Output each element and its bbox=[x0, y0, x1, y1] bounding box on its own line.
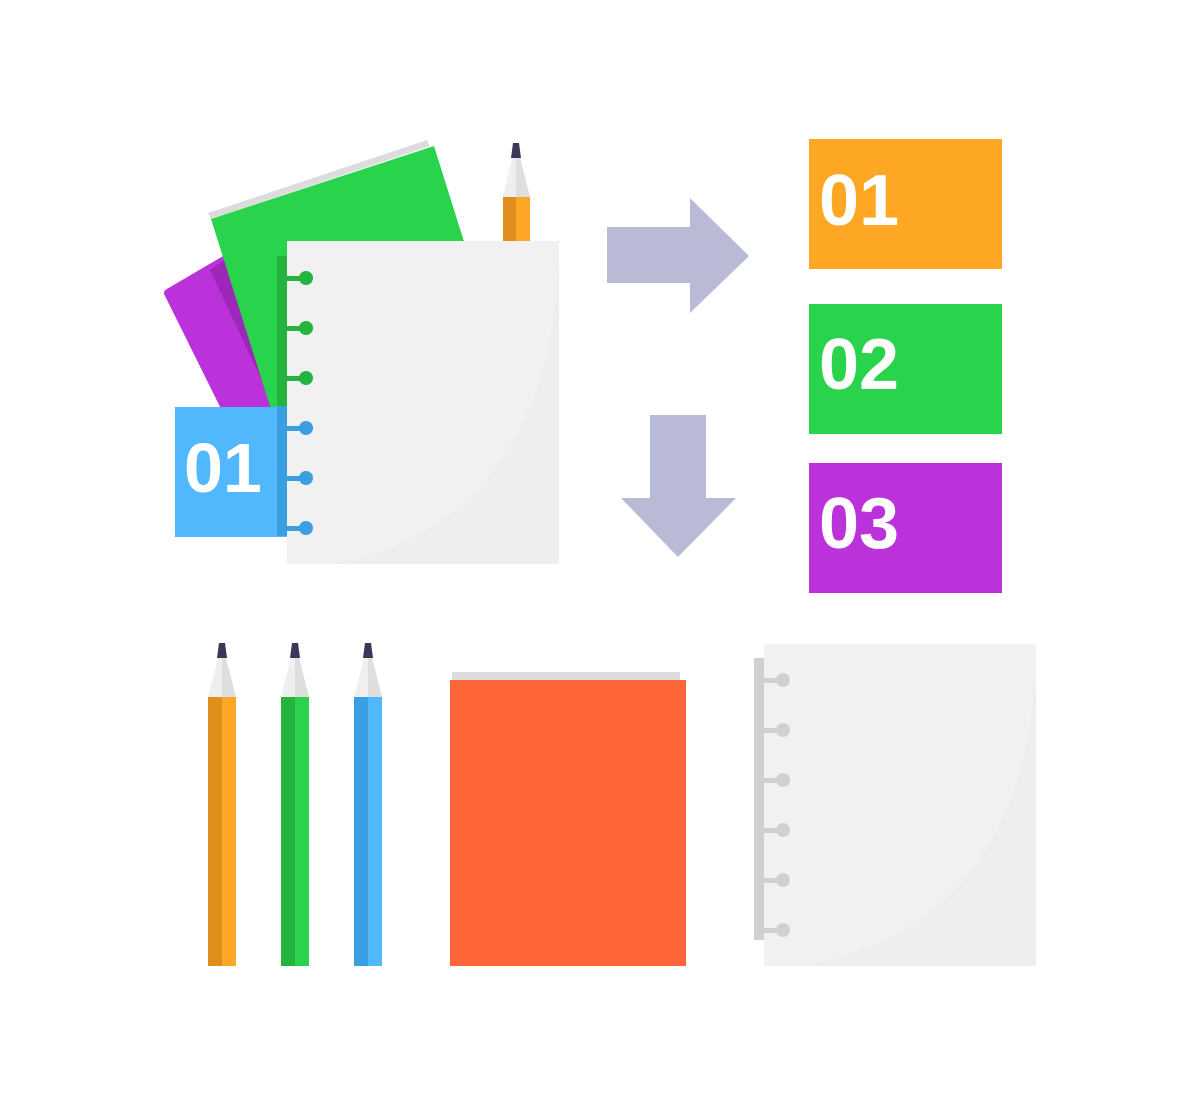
label 02 green bbox=[809, 304, 1002, 434]
label 03 purple: 03 bbox=[819, 484, 899, 564]
label 03 purple bbox=[809, 463, 1002, 593]
arrow down bbox=[621, 415, 736, 557]
green pencil bbox=[281, 642, 309, 966]
arrow right bbox=[607, 198, 749, 313]
blue label 01 bbox=[175, 407, 287, 537]
small pencil bbox=[503, 142, 530, 241]
blank spiral page bbox=[754, 644, 1036, 966]
green book bbox=[208, 140, 520, 492]
blue pencil bbox=[354, 642, 382, 966]
blue label 01: 01 bbox=[184, 429, 262, 507]
spiral notebook page bbox=[277, 241, 559, 564]
label 01 orange bbox=[809, 139, 1002, 269]
purple book bbox=[168, 259, 302, 430]
orange pencil bbox=[208, 642, 236, 966]
label 02 green: 02 bbox=[819, 325, 899, 405]
label 01 orange: 01 bbox=[819, 161, 899, 241]
red book bbox=[450, 672, 686, 966]
